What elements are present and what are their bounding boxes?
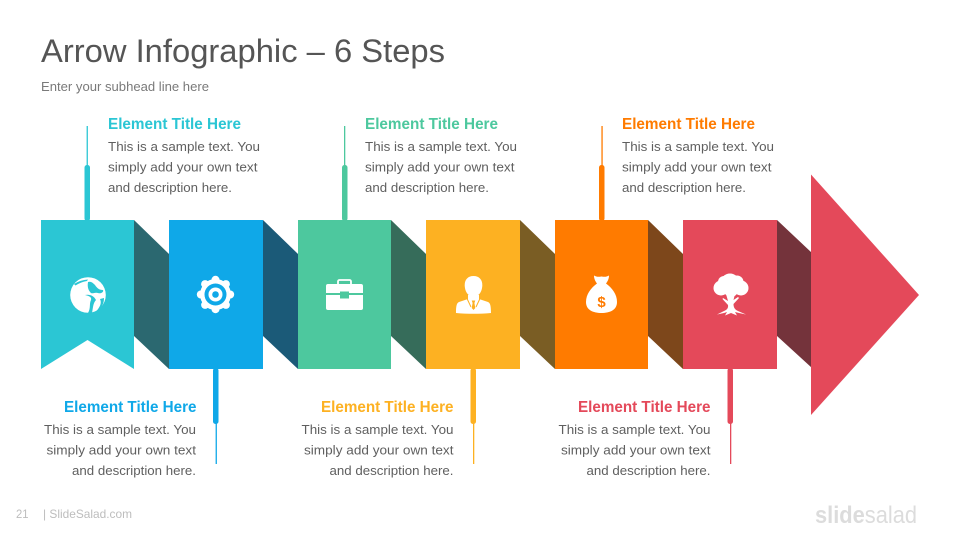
text block: step 3: simply add your own text: [365, 160, 515, 174]
stem step 6: [728, 368, 733, 464]
text block: step 4: [302, 399, 454, 478]
text block: step 1: This is a sample text. You: [108, 139, 260, 154]
stem step 1: [84, 126, 90, 221]
text block: step 4: This is a sample text. You: [302, 422, 454, 437]
subhead: Enter your subhead line here: [41, 79, 209, 94]
text block: step 1: Element Title Here: [108, 116, 241, 133]
icon: money bag: $: [597, 294, 606, 311]
text block: step 1: simply add your own text: [108, 160, 258, 174]
stem step 4: [470, 368, 476, 464]
title: Arrow Infographic – 6 Steps: [41, 33, 445, 69]
step 4 block: [426, 220, 520, 369]
icon: gear: [197, 276, 234, 313]
footer page number: 21: [16, 507, 29, 521]
footer site name: | SlideSalad.com: [43, 507, 132, 521]
text block: step 3: Element Title Here: [365, 116, 498, 133]
icon: globe: [70, 277, 106, 313]
text block: step 5: simply add your own text: [622, 160, 772, 174]
text block: step 4: Element Title Here: [321, 399, 454, 416]
text block: step 3: This is a sample text. You: [365, 139, 517, 154]
text block: step 1: [108, 116, 260, 195]
icon: businessman: [456, 276, 491, 314]
text block: step 3: [365, 116, 517, 195]
step 5 block: [555, 220, 648, 369]
connector shadows between steps: [134, 220, 812, 369]
text block: step 4: and description here.: [330, 463, 454, 478]
stem step 5: [599, 126, 604, 221]
text block: step 5: Element Title Here: [622, 116, 755, 133]
text block: step 6: This is a sample text. You: [558, 422, 710, 437]
text block: step 6: Element Title Here: [578, 399, 711, 416]
text block: step 6: and description here.: [586, 463, 710, 478]
step 3 block: [298, 220, 391, 369]
text block: step 2: [44, 399, 197, 478]
footer logo: slidesalad: [815, 502, 917, 529]
stem step 3: [342, 126, 348, 221]
text block: step 6: [558, 399, 711, 478]
arrow head: [811, 174, 919, 415]
icon: money bag: [586, 276, 617, 313]
step 2 block: [169, 220, 263, 369]
text block: step 5: This is a sample text. You: [622, 139, 774, 154]
step 6 block: [683, 220, 777, 369]
text block: step 5: and description here.: [622, 180, 746, 195]
text block: step 1: and description here.: [108, 180, 232, 195]
text block: step 2: and description here.: [72, 463, 196, 478]
text block: step 3: and description here.: [365, 180, 489, 195]
step 1 banner: [41, 220, 134, 369]
icon: tree: [714, 274, 748, 316]
text block: step 4: simply add your own text: [304, 442, 454, 458]
text block: step 2: Element Title Here: [64, 399, 197, 416]
stem step 2: [213, 368, 218, 464]
text block: step 6: simply add your own text: [561, 442, 711, 458]
icon: briefcase: [326, 280, 363, 310]
text block: step 2: simply add your own text: [46, 442, 196, 458]
text block: step 2: This is a sample text. You: [44, 422, 196, 437]
text block: step 5: [622, 116, 774, 195]
